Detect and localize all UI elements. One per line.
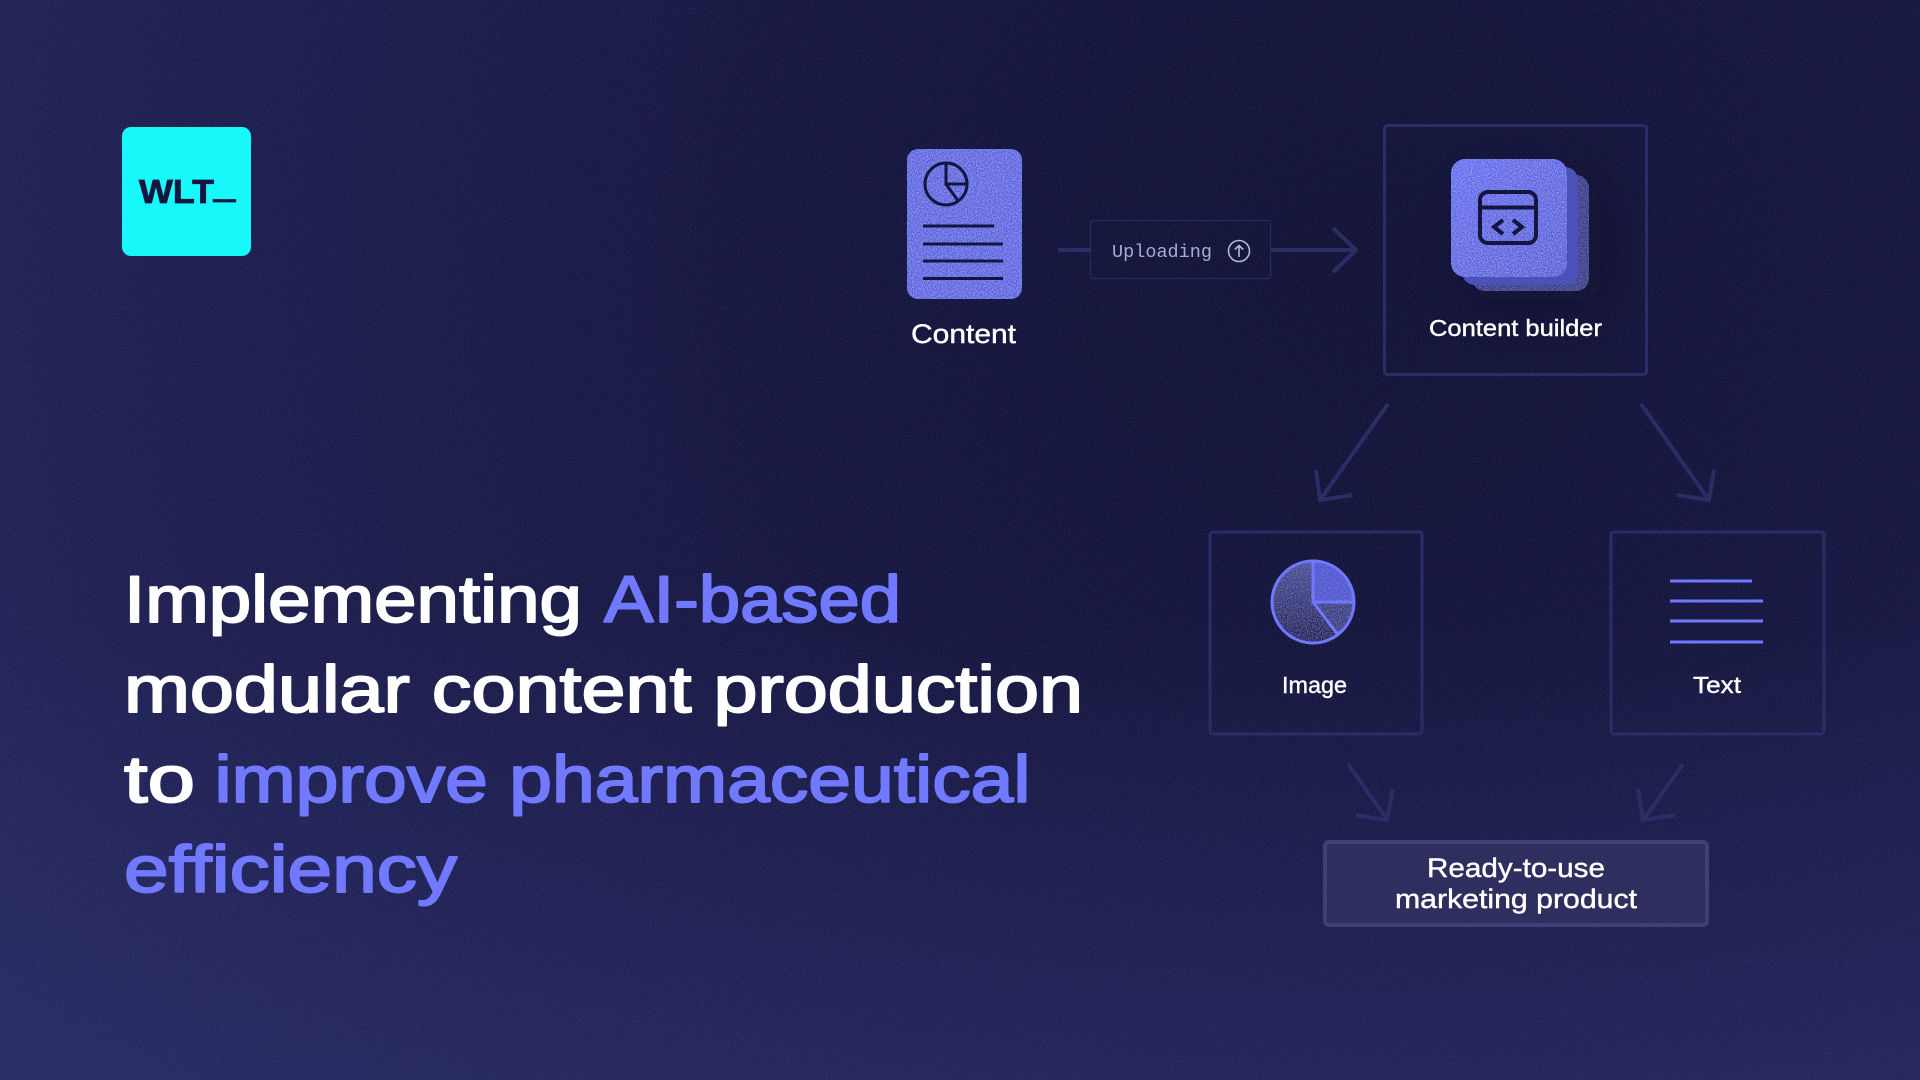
title line 1: Implementing <box>124 562 582 636</box>
label: ready-to-use: Ready-to-use <box>1427 853 1605 883</box>
label: content: Content <box>911 319 1017 349</box>
label: text: Text <box>1693 672 1742 698</box>
title line 1 <box>124 562 901 636</box>
label: image: Image <box>1282 672 1347 698</box>
title line 4: efficiency <box>124 832 457 906</box>
title line 1: AI-based <box>604 562 901 636</box>
panel: ready-to-use marketing product <box>1325 842 1707 925</box>
panel: content builder <box>1384 126 1646 374</box>
arrow: uploading <box>1058 220 1356 278</box>
label: marketing product: marketing product <box>1395 884 1638 914</box>
title line 2: modular content production <box>124 652 1083 726</box>
title line 3: improve pharmaceutical <box>214 742 1030 816</box>
panel: text <box>1611 532 1824 734</box>
icon: stacked code window <box>1451 159 1589 291</box>
logo <box>122 127 251 256</box>
panel: image <box>1210 532 1422 734</box>
arrow: builder to image <box>1316 404 1388 500</box>
title line 3: to <box>124 742 195 816</box>
title <box>124 562 1083 906</box>
logo: _ <box>213 164 236 206</box>
icon: content document <box>907 149 1022 299</box>
icon: text lines <box>1670 581 1763 642</box>
label: content builder: Content builder <box>1429 315 1602 341</box>
arrow: image to product <box>1348 764 1393 820</box>
arrow: builder to text <box>1641 404 1714 500</box>
logo: WLT <box>139 173 214 210</box>
uploading badge: Uploading <box>1112 242 1212 263</box>
content node <box>907 149 1022 349</box>
icon: pie chart <box>1272 561 1354 643</box>
arrow: text to product <box>1638 764 1683 820</box>
uploading badge <box>1090 220 1270 278</box>
